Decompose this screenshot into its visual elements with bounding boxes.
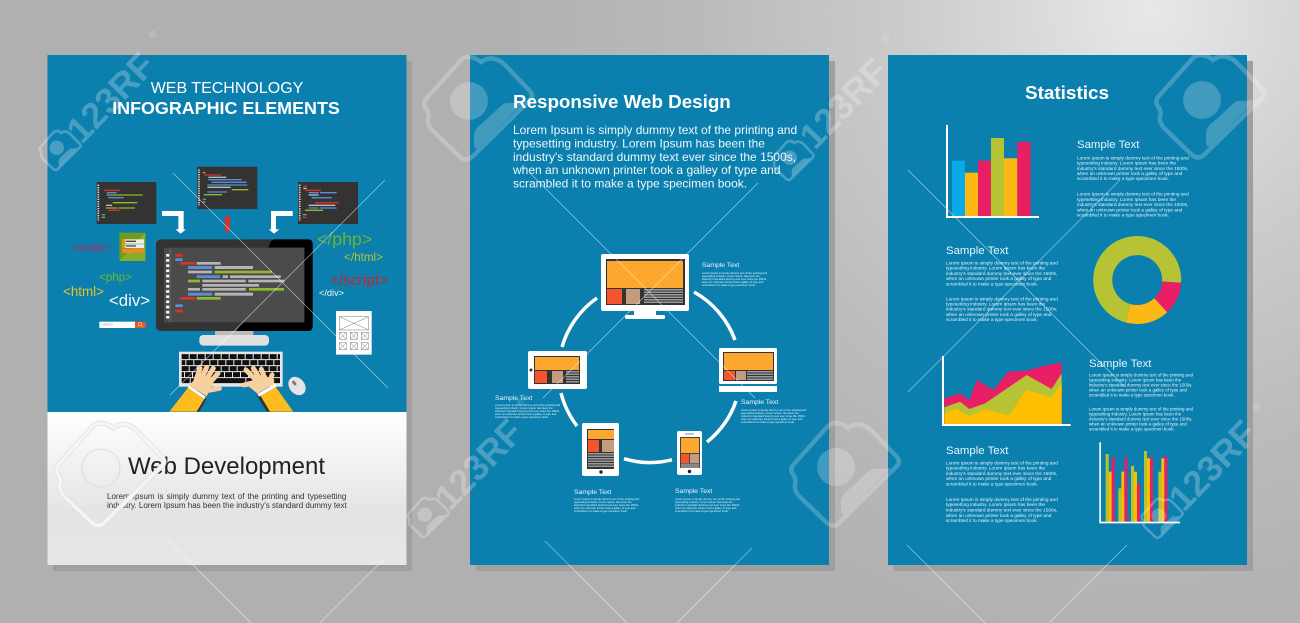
watermark: logo bottom right bbox=[1142, 402, 1265, 538]
text block: top right: typesetting industry. Lorem Ipsum has been the bbox=[1077, 160, 1176, 166]
label: phone bbox=[675, 488, 741, 513]
text block: second: typesetting industry. Lorem Ipsum has been the bbox=[946, 266, 1045, 272]
heading: statistics: Statistics bbox=[1025, 83, 1109, 104]
label: desktop: industry's standard dummy text ever since the 1500s, bbox=[702, 277, 767, 281]
text block: third: Sample Text bbox=[1089, 358, 1152, 370]
label: portrait tablet: when an unknown printer took a galley of type and bbox=[574, 506, 636, 510]
web development heading: Web Development bbox=[128, 453, 325, 480]
text block: third: when an unknown printer took a galley of type and bbox=[1089, 422, 1187, 427]
text block: top right: when an unknown printer took a galley of type and bbox=[1077, 171, 1183, 177]
label: desktop: when an unknown printer took a galley of type and bbox=[702, 280, 764, 284]
label: desktop: Lorem Ipsum is simply dummy text of the printing and bbox=[702, 271, 768, 275]
code tags bbox=[63, 229, 388, 310]
text block: second: industry's standard dummy text ever since the 1500s, bbox=[946, 271, 1057, 277]
text block: third: Lorem Ipsum is simply dummy text of the printing and bbox=[1089, 406, 1194, 411]
watermark: logo top centre-right bbox=[773, 34, 896, 180]
text block: top right: Lorem Ipsum is simply dummy text of the printing and bbox=[1077, 192, 1189, 198]
label: landscape tablet: Sample Text bbox=[495, 395, 532, 402]
code tags: </php> bbox=[317, 229, 372, 249]
text block: fourth: when an unknown printer took a galley of type and bbox=[946, 476, 1052, 482]
heading: web technology: WEB TECHNOLOGY bbox=[151, 80, 304, 97]
hands and sleeves bbox=[169, 367, 293, 412]
text block: fourth: industry's standard dummy text ever since the 1500s, bbox=[946, 471, 1057, 477]
intro text: typesetting industry. Lorem Ipsum has been the bbox=[513, 136, 765, 150]
heading: responsive web design: Responsive Web Design bbox=[513, 91, 731, 112]
intro text: Lorem Ipsum is simply dummy text of the printing and bbox=[513, 123, 797, 137]
web development text bbox=[107, 492, 347, 510]
code tags: <html> bbox=[63, 284, 104, 299]
label: portrait tablet: industry's standard dummy text ever since the 1500s, bbox=[574, 503, 639, 507]
text block: top right: scrambled it to make a type specimen book. bbox=[1077, 212, 1169, 218]
arrow right bbox=[269, 211, 293, 234]
text block: third: typesetting industry. Lorem Ipsum has been the bbox=[1089, 411, 1182, 416]
label: phone: scrambled it to make a type specimen book. bbox=[675, 509, 729, 513]
text block: third: typesetting industry. Lorem Ipsum has been the bbox=[1089, 377, 1182, 382]
label: laptop: Lorem Ipsum is simply dummy text of the printing and bbox=[741, 408, 807, 412]
label: landscape tablet: industry's standard dummy text ever since the 1500s, bbox=[495, 409, 560, 413]
label: portrait tablet bbox=[574, 489, 640, 513]
search bar bbox=[99, 322, 146, 328]
intro text: scrambled it to make a type specimen book. bbox=[513, 176, 747, 190]
illustration: developer at computer bbox=[97, 167, 372, 412]
watermark: logo bottom right: 123RF bbox=[1160, 412, 1265, 519]
text block: fourth: when an unknown printer took a galley of type and bbox=[946, 513, 1052, 519]
text block: top right: industry's standard dummy text ever since the 1500s, bbox=[1077, 202, 1188, 208]
watermark: large stamp on white section bbox=[56, 423, 164, 526]
watermark: logo top left: ® bbox=[149, 30, 157, 41]
text block: third: when an unknown printer took a galley of type and bbox=[1089, 388, 1187, 393]
label: desktop: Sample Text bbox=[702, 262, 739, 269]
text block: second: typesetting industry. Lorem Ipsum has been the bbox=[946, 302, 1045, 308]
search bar: SEARCH bbox=[102, 323, 113, 327]
text block: second: scrambled it to make a type specimen book. bbox=[946, 281, 1038, 287]
keyboard bbox=[179, 352, 283, 387]
label: portrait tablet: Sample Text bbox=[574, 489, 611, 496]
device: phone bbox=[677, 431, 702, 475]
panel: statistics bbox=[888, 55, 1253, 571]
text block: fourth: Sample Text bbox=[946, 445, 1009, 457]
watermark: large stamp top centre bbox=[424, 57, 532, 160]
text block: fourth: scrambled it to make a type specimen book. bbox=[946, 481, 1038, 487]
text block: fourth: typesetting industry. Lorem Ipsum has been the bbox=[946, 466, 1045, 472]
web development text: Lorem Ipsum is simply dummy text of the printing and typesetting bbox=[107, 492, 346, 501]
label: landscape tablet: typesetting industry. Lorem Ipsum has been the bbox=[495, 406, 553, 410]
text block: top right: typesetting industry. Lorem Ipsum has been the bbox=[1077, 197, 1176, 203]
text block: second: industry's standard dummy text ever since the 1500s, bbox=[946, 307, 1057, 313]
code tags: <script> bbox=[72, 242, 110, 254]
monitor bbox=[156, 239, 313, 346]
text block: third bbox=[1089, 358, 1194, 432]
text block: second: when an unknown printer took a galley of type and bbox=[946, 276, 1052, 282]
watermark: logo top left: 123RF bbox=[58, 44, 163, 151]
intro text: when an unknown printer took a galley of type and bbox=[512, 163, 781, 177]
text block: second: Lorem Ipsum is simply dummy text of the printing and bbox=[946, 296, 1058, 302]
label: desktop: scrambled it to make a type specimen book. bbox=[702, 283, 756, 287]
code lines bbox=[175, 254, 284, 312]
device ring bbox=[561, 292, 736, 463]
device: portrait tablet bbox=[582, 423, 619, 476]
label: landscape tablet: when an unknown printer took a galley of type and bbox=[495, 412, 557, 416]
watermark: large stamp top right bbox=[1156, 55, 1264, 158]
text block: second bbox=[946, 245, 1058, 323]
arrow left bbox=[162, 211, 186, 234]
grouped bar chart bbox=[1100, 442, 1180, 522]
label: landscape tablet bbox=[495, 395, 561, 419]
text block: fourth: Lorem Ipsum is simply dummy text of the printing and bbox=[946, 460, 1058, 466]
text block: second: when an unknown printer took a galley of type and bbox=[946, 312, 1052, 318]
label: portrait tablet: Lorem Ipsum is simply dummy text of the printing and bbox=[574, 497, 640, 501]
text block: third: scrambled it to make a type specimen book. bbox=[1089, 427, 1175, 432]
web development text: industry. Lorem Ipsum has been the industry's standard dummy text bbox=[107, 501, 347, 510]
label: laptop: typesetting industry. Lorem Ipsum has been the bbox=[741, 411, 799, 415]
label: desktop: typesetting industry. Lorem Ipsum has been the bbox=[702, 274, 760, 278]
wireframe page bbox=[336, 311, 372, 355]
arrow centre bbox=[225, 216, 230, 233]
text block: top right: industry's standard dummy text ever since the 1500s, bbox=[1077, 166, 1188, 172]
device: laptop bbox=[719, 348, 777, 392]
watermark: logo bottom centre-left bbox=[408, 397, 531, 537]
text block: third: scrambled it to make a type specimen book. bbox=[1089, 393, 1175, 398]
label: phone: typesetting industry. Lorem Ipsum has been the bbox=[675, 500, 733, 504]
code window centre bbox=[197, 167, 257, 209]
label: desktop bbox=[702, 262, 768, 287]
label: laptop: scrambled it to make a type specimen book. bbox=[741, 420, 795, 424]
panel: web development bbox=[48, 55, 412, 571]
bar chart bbox=[947, 125, 1039, 217]
code tags: <div> bbox=[109, 291, 150, 310]
label: phone: Lorem Ipsum is simply dummy text of the printing and bbox=[675, 497, 741, 501]
text block: third: industry's standard dummy text ever since the 1500s, bbox=[1089, 416, 1193, 422]
area chart bbox=[943, 356, 1071, 425]
text block: top right: Sample Text bbox=[1077, 139, 1140, 151]
text block: fourth: scrambled it to make a type specimen book. bbox=[946, 518, 1038, 524]
label: phone: industry's standard dummy text ever since the 1500s, bbox=[675, 503, 740, 507]
label: phone: when an unknown printer took a galley of type and bbox=[675, 506, 737, 510]
text block: fourth: Lorem Ipsum is simply dummy text of the printing and bbox=[946, 497, 1058, 503]
panel: responsive web design bbox=[470, 55, 835, 571]
text block: top right: Lorem Ipsum is simply dummy text of the printing and bbox=[1077, 155, 1189, 161]
label: landscape tablet: scrambled it to make a type specimen book. bbox=[495, 415, 549, 419]
intro text: industry's standard dummy text ever since the 1500s, bbox=[513, 150, 796, 164]
code tags: </div> bbox=[319, 288, 344, 298]
watermark: logo top centre-right: ® bbox=[882, 34, 890, 45]
icon: login form bbox=[119, 233, 145, 261]
label: landscape tablet: Lorem Ipsum is simply dummy text of the printing and bbox=[495, 403, 561, 407]
watermark: logo top left bbox=[40, 30, 163, 170]
device: landscape tablet bbox=[528, 351, 587, 389]
text block: second: Lorem Ipsum is simply dummy text of the printing and bbox=[946, 260, 1058, 266]
label: phone: Sample Text bbox=[675, 488, 712, 495]
text block: fourth: typesetting industry. Lorem Ipsum has been the bbox=[946, 502, 1045, 508]
mouse bbox=[285, 373, 309, 399]
donut chart bbox=[1093, 236, 1181, 324]
watermark: logo bottom centre-left: 123RF bbox=[426, 411, 531, 518]
code window right bbox=[298, 182, 358, 224]
code tags: <php> bbox=[99, 271, 132, 284]
text block: fourth: industry's standard dummy text ever since the 1500s, bbox=[946, 508, 1057, 514]
watermark: logo bottom right: ® bbox=[1253, 402, 1261, 413]
heading: web technology bbox=[112, 80, 340, 118]
text block: third: Lorem Ipsum is simply dummy text of the printing and bbox=[1089, 372, 1194, 377]
code tags: </script> bbox=[330, 272, 388, 289]
code tags: </html> bbox=[344, 251, 383, 264]
label: laptop: industry's standard dummy text ever since the 1500s, bbox=[741, 414, 806, 418]
text block: second: Sample Text bbox=[946, 245, 1009, 257]
text block: second: scrambled it to make a type specimen book. bbox=[946, 317, 1038, 323]
text block: top right: when an unknown printer took a galley of type and bbox=[1077, 207, 1183, 213]
text block: top right: scrambled it to make a type specimen book. bbox=[1077, 176, 1169, 182]
watermark: logo top centre-right: 123RF bbox=[791, 50, 896, 157]
label: laptop: Sample Text bbox=[741, 399, 778, 406]
text block: third: industry's standard dummy text ever since the 1500s, bbox=[1089, 382, 1193, 388]
label: portrait tablet: typesetting industry. Lorem Ipsum has been the bbox=[574, 500, 632, 504]
watermark: large stamp bottom centre bbox=[791, 423, 899, 526]
heading: web technology: INFOGRAPHIC ELEMENTS bbox=[112, 98, 340, 118]
label: portrait tablet: scrambled it to make a type specimen book. bbox=[574, 509, 628, 513]
text block: top right bbox=[1077, 139, 1189, 218]
intro text bbox=[512, 123, 797, 190]
label: laptop bbox=[741, 399, 807, 424]
watermark: logo bottom centre-left: ® bbox=[517, 397, 525, 408]
label: laptop: when an unknown printer took a galley of type and bbox=[741, 417, 803, 421]
text block: fourth bbox=[946, 445, 1058, 524]
device: desktop bbox=[601, 254, 689, 319]
code window left bbox=[97, 182, 156, 224]
